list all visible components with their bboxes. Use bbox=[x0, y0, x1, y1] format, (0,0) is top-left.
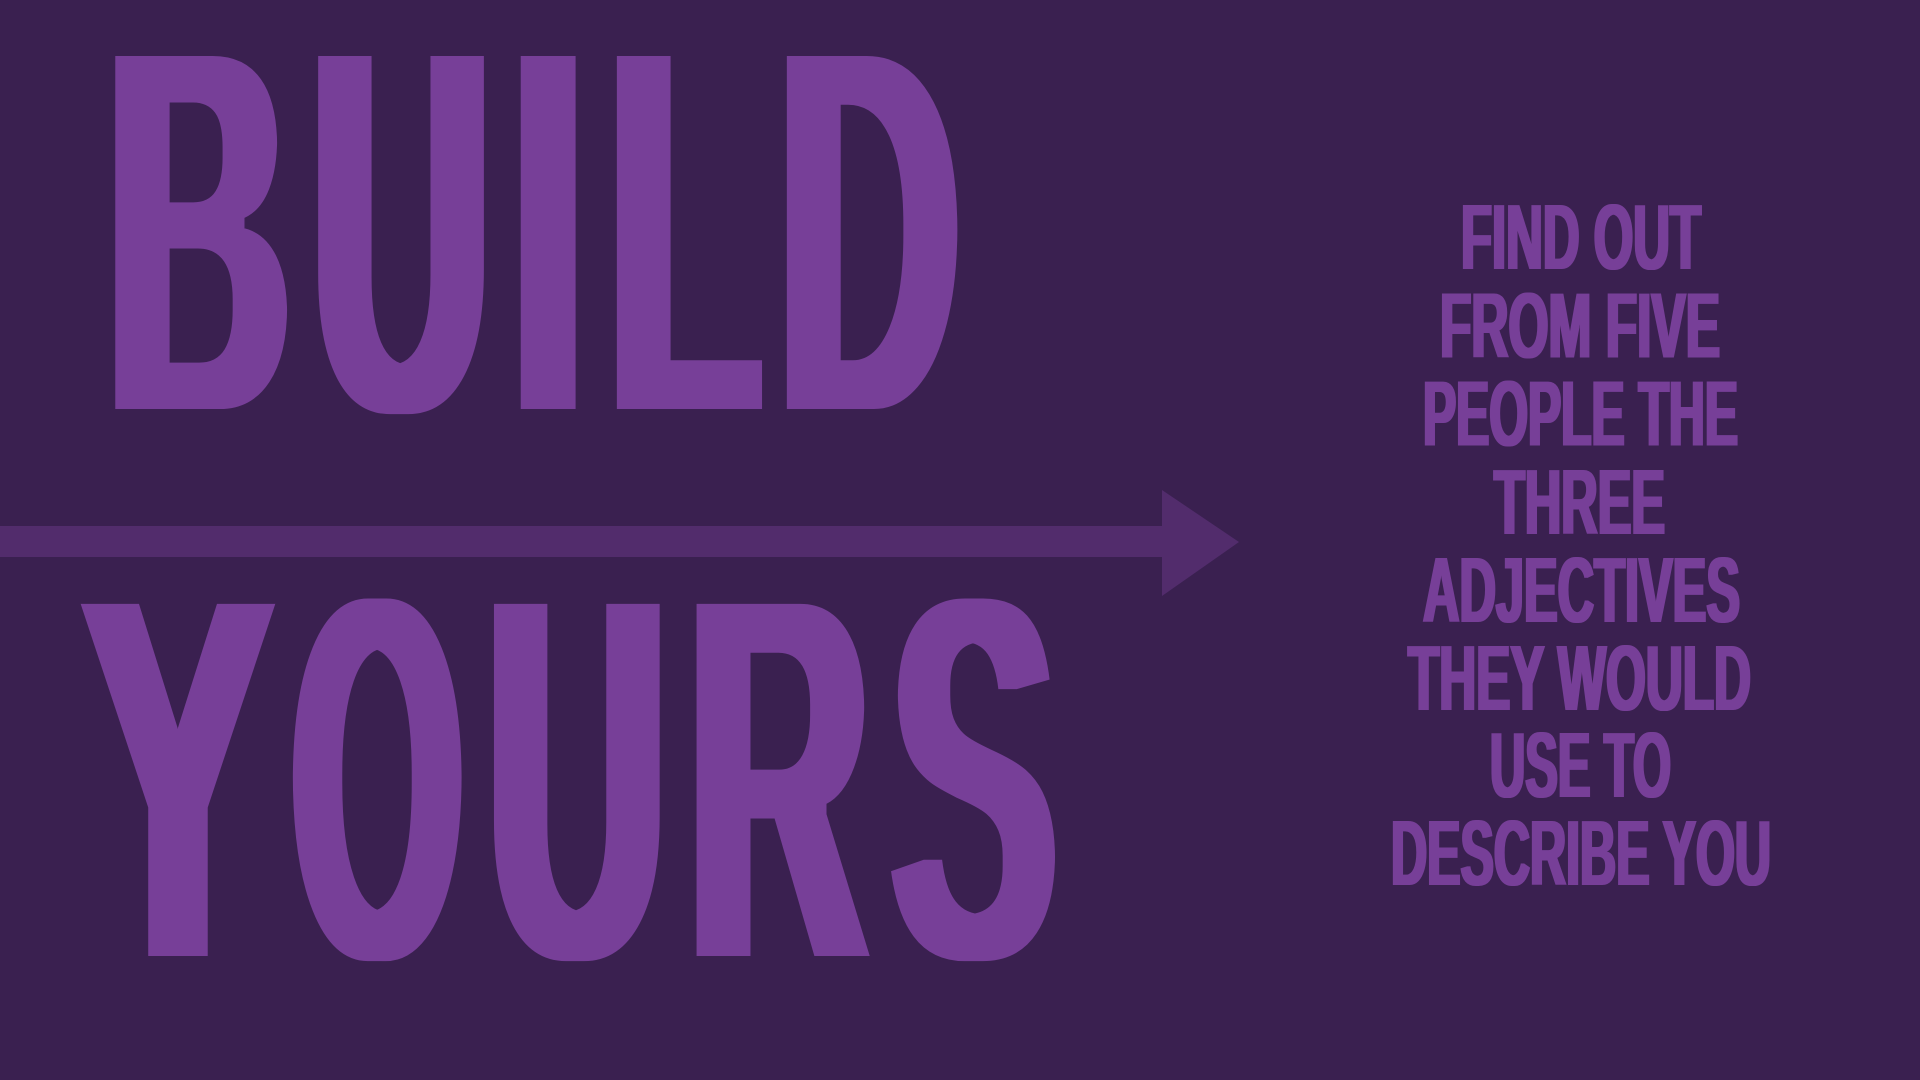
heading: YOURS: S bbox=[892, 486, 1056, 1074]
heading: YOURS: Y bbox=[81, 485, 274, 1073]
text block: instructions bbox=[1391, 185, 1771, 905]
text block: instructions: THREE bbox=[1494, 450, 1665, 554]
text block: instructions: FIND OUT bbox=[1461, 185, 1701, 289]
heading: YOURS bbox=[81, 485, 1056, 1074]
arrow bbox=[0, 490, 1239, 596]
heading: BUILD bbox=[107, 0, 959, 527]
text block: instructions: USE TO bbox=[1490, 713, 1671, 817]
heading: YOURS: U bbox=[488, 486, 666, 1074]
heading: YOURS: O bbox=[293, 486, 462, 1073]
heading: YOURS: R bbox=[689, 486, 869, 1073]
